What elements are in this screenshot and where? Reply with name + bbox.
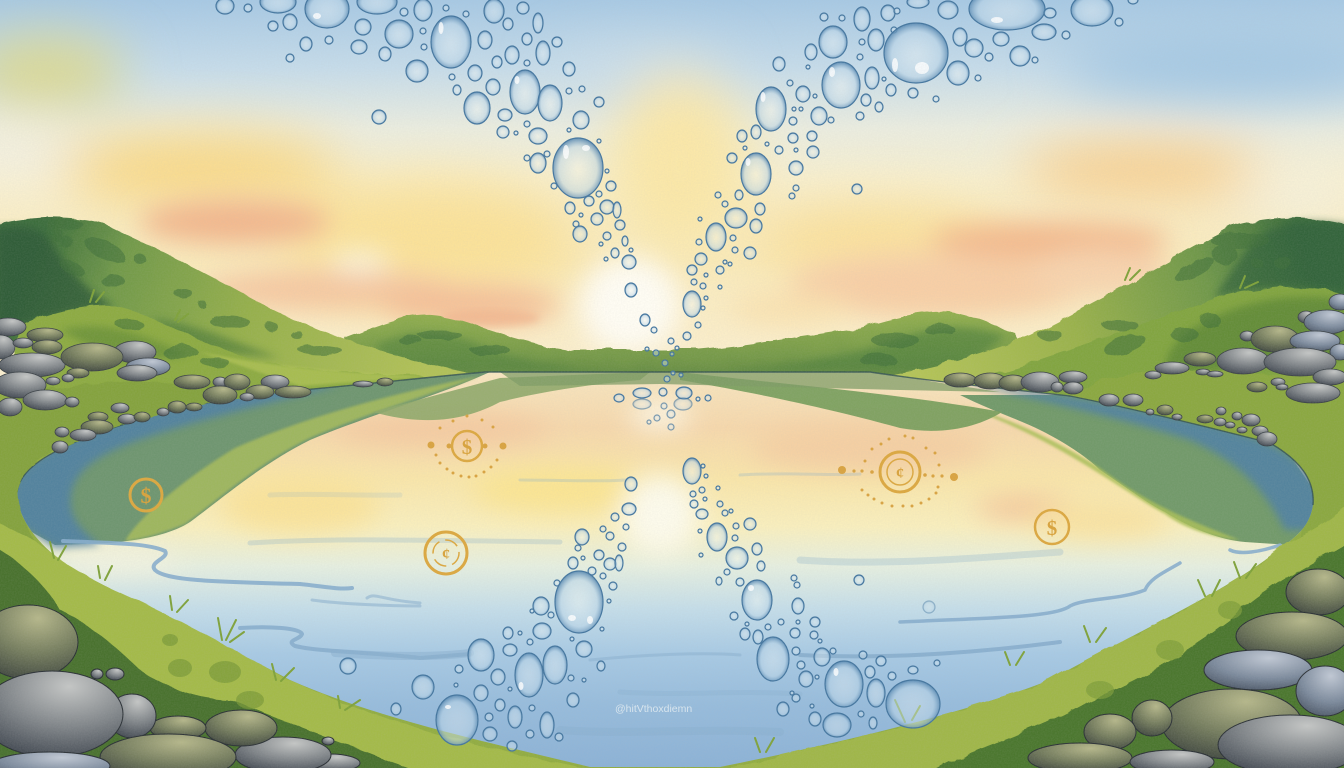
right big hill	[868, 218, 1344, 395]
coin: left small dollar	[130, 479, 162, 511]
sky background	[0, 0, 1344, 400]
droplets: left stream in sky	[216, 0, 657, 333]
coin: orbit dollar	[428, 414, 506, 478]
watermark text: @hitVthoxdiemn	[615, 703, 692, 715]
left bank grass near shore	[0, 382, 300, 541]
lake shoreline	[17, 372, 1313, 505]
right blue band	[960, 382, 1320, 530]
droplets: reflection centre	[614, 347, 711, 430]
stones: upper right cluster	[944, 294, 1344, 446]
right green reflection	[960, 395, 1320, 545]
left big hill	[0, 217, 482, 392]
right lower hill	[960, 287, 1344, 420]
foreground grass left	[0, 505, 600, 768]
coin: orbit right: ¢	[896, 465, 904, 482]
coin: orbit dollar: $	[462, 435, 472, 459]
water ripples	[61, 472, 1282, 662]
stones: lower left cluster	[0, 605, 360, 768]
left blue band	[12, 384, 340, 548]
grass bank around the lake	[0, 376, 1344, 768]
droplets: left stream reflection	[340, 477, 637, 751]
centre hill reflections	[373, 372, 650, 420]
coin: orbit right	[838, 434, 958, 508]
lake	[0, 370, 1344, 768]
droplets: right stream in sky	[668, 0, 1138, 350]
droplet highlights	[313, 13, 1003, 709]
far centre hills	[330, 312, 1040, 385]
coin: lower left: ¢	[442, 546, 450, 563]
coin: left small dollar: $	[140, 483, 152, 508]
right grassy slope	[1070, 368, 1344, 620]
coin: right small	[1035, 510, 1069, 544]
coin: lower left	[425, 532, 467, 574]
foreground grass right	[710, 500, 1344, 768]
left lower hill	[0, 306, 482, 410]
hill texture patches	[47, 219, 1290, 367]
stones: upper left cluster	[0, 318, 393, 453]
coin: right small: $	[1047, 516, 1057, 540]
grass tufts	[50, 268, 1258, 752]
left green reflection	[10, 372, 490, 545]
stones: lower right cluster	[1028, 569, 1344, 768]
droplets: right stream reflection	[683, 458, 940, 737]
